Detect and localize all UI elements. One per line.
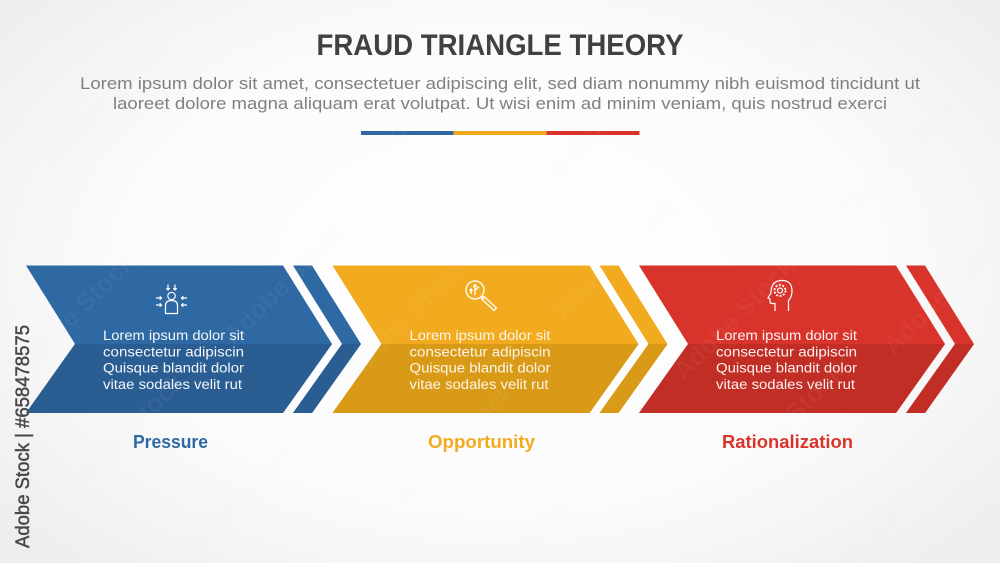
icon: person under pressure [156,284,187,314]
pressure description: Lorem ipsum dolor sit [103,328,244,343]
watermark pattern: Adobe Stock [547,191,681,325]
red arrow shapes [639,266,974,413]
rationalization description [716,328,858,392]
watermark pattern: Adobe Stock [387,376,521,510]
panel: opportunity [332,266,668,413]
intro text [80,74,920,113]
pressure description: consectetur adipiscin [103,344,244,360]
opportunity description: Quisque blandit dolor [410,360,551,376]
watermark pattern: Adobe Stock [337,251,471,385]
watermark pattern: Adobe Stock [697,11,831,145]
intro text: laoreet dolore magna aliquam erat volutpat. Ut wisi enim ad minim veniam, quis nostrud exerci [113,94,887,113]
opportunity description: consectetur adipiscin [410,344,550,360]
pressure description: Quisque blandit dolor [103,360,245,376]
blue arrow shapes [26,266,361,413]
icon: head with gear [768,280,792,311]
watermark pattern: Adobe Stock [217,216,351,350]
pressure description: vitae sodales velit rut [103,377,242,392]
panel: pressure [26,266,361,413]
watermark pattern: Adobe Stock [162,91,296,225]
title: FRAUD TRIANGLE THEORY [316,29,684,62]
rationalization description: consectetur adipiscin [716,344,857,360]
rationalization description: Quisque blandit dolor [716,360,858,376]
rationalization description: Lorem ipsum dolor sit [716,328,857,343]
watermark pattern: Adobe Stock [667,251,801,385]
watermark pattern: Adobe Stock [7,246,141,380]
watermark pattern: Adobe Stock [57,366,191,500]
yellow arrow shapes [332,266,668,413]
intro text: Lorem ipsum dolor sit amet, consectetuer adipiscing elit, sed diam nonummy nibh euismod tincidunt ut [80,74,920,93]
watermark pattern: Adobe Stock [717,356,851,490]
opportunity description: Lorem ipsum dolor sit [410,328,551,343]
panel: rationalization [639,266,974,413]
watermark pattern: Adobe Stock [497,96,631,230]
label: pressure: Pressure [133,432,208,452]
watermark pattern: Adobe Stock [37,36,171,170]
watermark pattern: Adobe Stock [367,26,501,160]
tricolor divider [361,131,640,135]
watermark pattern: Adobe Stock [827,91,961,225]
opportunity description [410,328,551,392]
opportunity description: vitae sodales velit rut [410,377,549,392]
label: rationalization: Rationalization [722,432,853,452]
icon: magnifying glass [466,281,496,310]
stock id sidebar text: Adobe Stock | #658478575 [12,325,34,548]
rationalization description: vitae sodales velit rut [716,377,855,392]
label: opportunity: Opportunity [428,432,535,452]
pressure description [103,328,245,392]
